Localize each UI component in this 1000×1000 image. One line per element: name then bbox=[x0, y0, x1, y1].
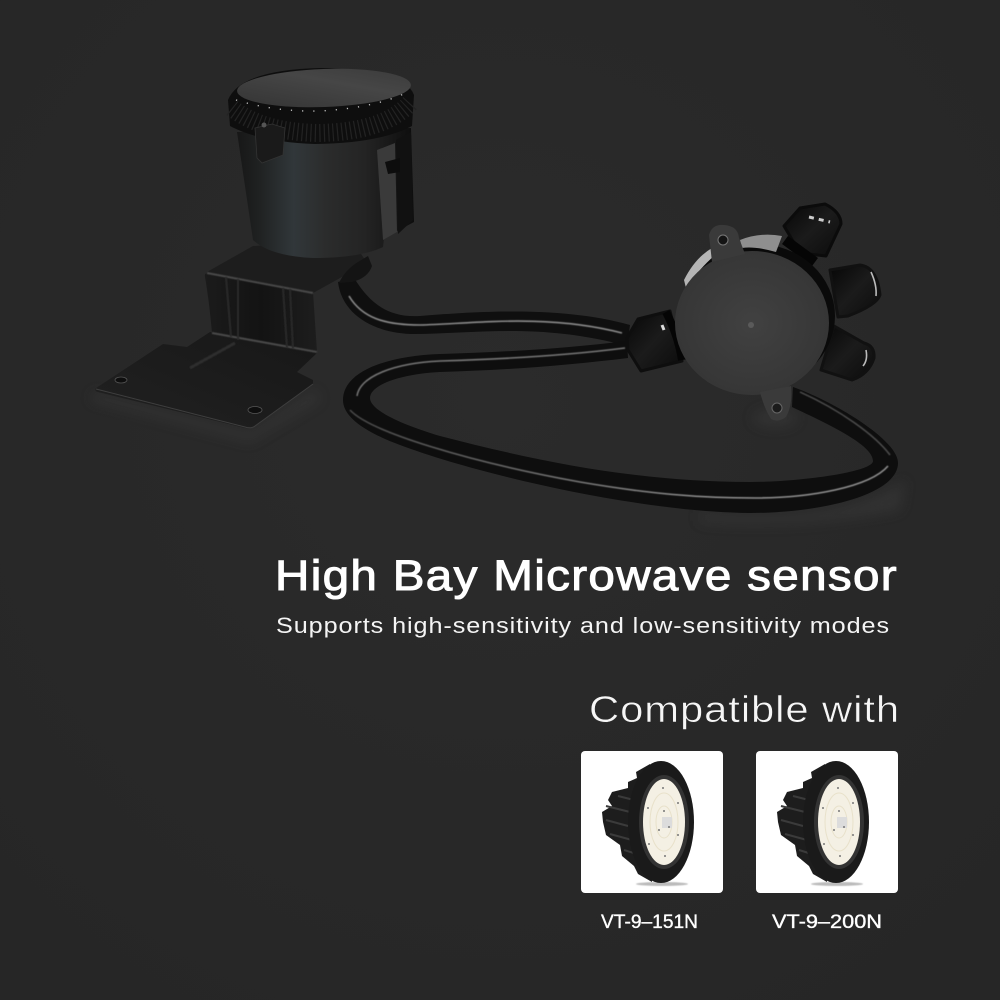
gland: left bbox=[627, 311, 682, 371]
sensor cap top face bbox=[236, 66, 412, 110]
sensor cap rim bbox=[228, 68, 414, 144]
card background bbox=[581, 751, 723, 893]
sensor latch bbox=[255, 124, 285, 163]
gland: right bbox=[830, 265, 880, 317]
bracket top plate bbox=[206, 240, 367, 293]
lamp model label: VT-9–151N bbox=[601, 912, 698, 933]
sensor cable collar bbox=[339, 256, 372, 283]
compatible with heading: Compatible with bbox=[589, 689, 900, 730]
sensor side clip bbox=[377, 132, 413, 240]
subtitle: Supports high-sensitivity and low-sensitivity modes bbox=[276, 613, 890, 638]
junction box cover bbox=[675, 251, 829, 395]
bracket base plate bbox=[95, 332, 317, 428]
icon: high bay lamp bbox=[777, 761, 869, 886]
floor glow under product bbox=[90, 390, 905, 524]
card background bbox=[756, 751, 898, 893]
junction box shell bbox=[679, 244, 835, 388]
title: High Bay Microwave sensor bbox=[275, 552, 898, 600]
cable: upper run from sensor to junction box bbox=[338, 256, 630, 346]
panel: compatible lamp VT-9-151N bbox=[581, 751, 723, 933]
sensor body bbox=[237, 128, 414, 258]
gland: lower right bbox=[821, 326, 874, 380]
lamp model label: VT-9–200N bbox=[772, 912, 882, 933]
product: junction box bbox=[627, 204, 880, 421]
icon: high bay lamp bbox=[602, 761, 694, 886]
mounting ear: top bbox=[709, 225, 745, 262]
gland: top right bbox=[784, 204, 841, 262]
panel: compatible lamp VT-9-200N bbox=[756, 751, 898, 933]
product: bracket bbox=[95, 240, 367, 428]
cable: large loop bbox=[343, 341, 898, 513]
product: sensor head bbox=[228, 66, 414, 258]
mounting ear: bottom bbox=[760, 386, 791, 421]
bracket vertical wall bbox=[205, 273, 317, 352]
